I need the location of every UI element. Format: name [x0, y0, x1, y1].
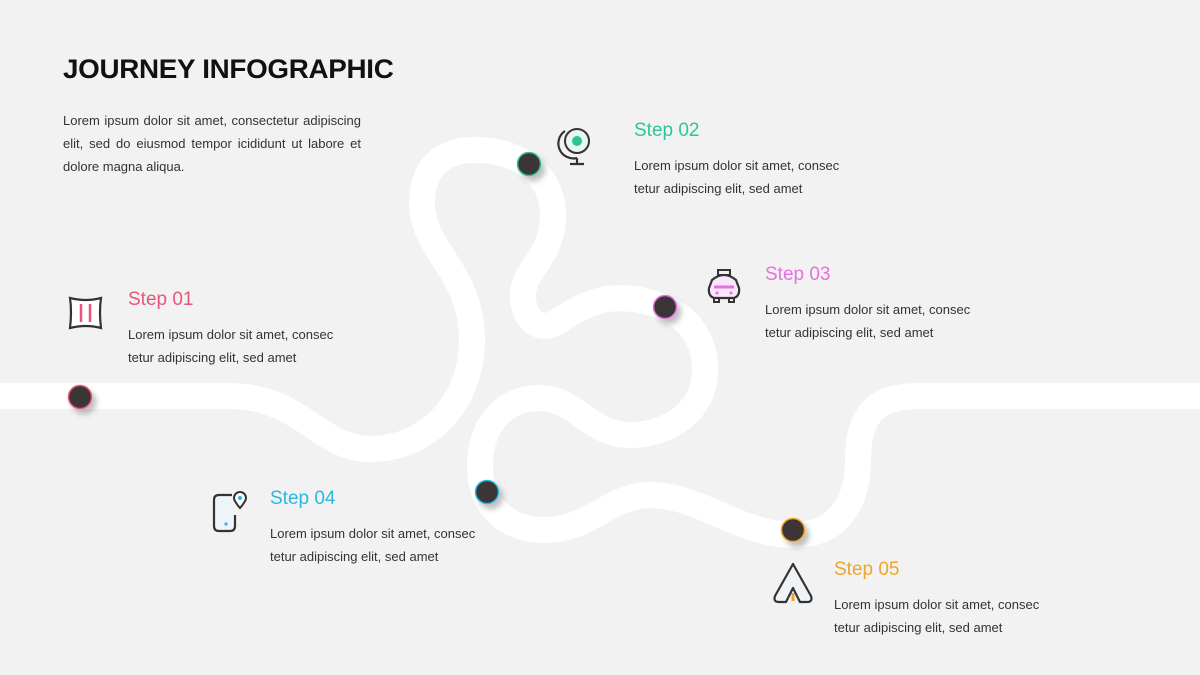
dot: step 01	[68, 386, 92, 408]
step 01: Lorem ipsum dolor sit amet, consec tetur adipiscing elit, sed amet	[128, 327, 333, 365]
icon: arrow	[773, 562, 813, 604]
step 04: Lorem ipsum dolor sit amet, consec tetur adipiscing elit, sed amet	[270, 526, 475, 564]
icon: globe	[557, 128, 590, 166]
step 05: Lorem ipsum dolor sit amet, consec tetur adipiscing elit, sed amet	[834, 597, 1039, 635]
dot: step 04	[476, 480, 498, 504]
dot: step 02	[518, 152, 540, 176]
step 04	[270, 488, 475, 564]
step 03: Lorem ipsum dolor sit amet, consec tetur adipiscing elit, sed amet	[765, 302, 970, 340]
icon: phone pin	[212, 491, 247, 532]
step 05: Step 05	[834, 559, 900, 580]
dot: step 03	[654, 296, 676, 318]
dot: step 05	[782, 518, 804, 542]
step 02: Step 02	[634, 120, 700, 141]
step 02	[634, 120, 839, 196]
step 02: Lorem ipsum dolor sit amet, consec tetur adipiscing elit, sed amet	[634, 158, 839, 196]
icon: map	[68, 296, 102, 330]
step 03	[765, 264, 970, 340]
step 03: Step 03	[765, 264, 830, 285]
step 05	[834, 559, 1039, 635]
step 01: Step 01	[128, 289, 194, 310]
icon: taxi	[708, 269, 740, 303]
step 04: Step 04	[270, 488, 336, 509]
step 01	[128, 289, 333, 365]
intro text: Lorem ipsum dolor sit amet, consectetur adipiscing elit, sed do eiusmod tempor icididunt ut labore et dolore magna aliqua.	[63, 113, 361, 174]
title: JOURNEY INFOGRAPHIC	[63, 54, 393, 84]
